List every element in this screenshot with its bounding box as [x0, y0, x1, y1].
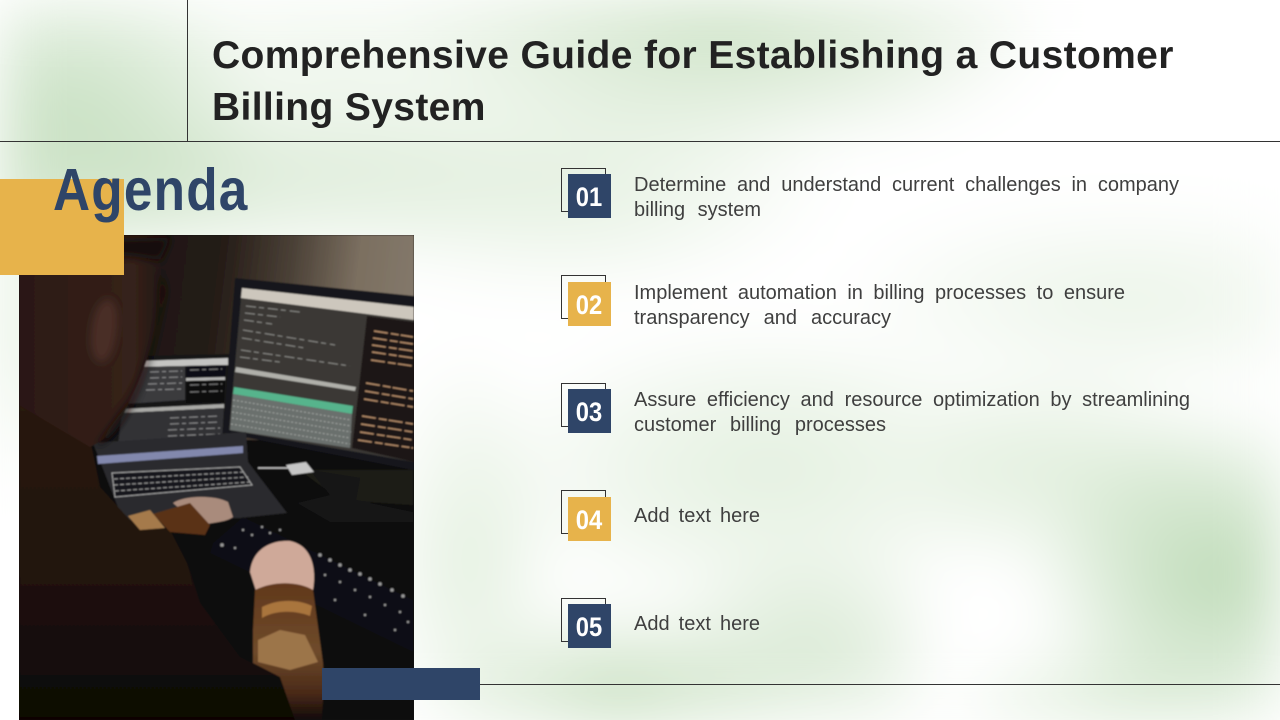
right hand and forearm [250, 541, 324, 720]
number badge 04 [561, 490, 611, 541]
laptop [93, 432, 287, 520]
rule: title divider vertical [187, 0, 188, 141]
item 05 [561, 598, 760, 648]
item text 01: billing system [634, 199, 761, 221]
number badge 03: 03 [576, 397, 603, 427]
photo: person working at computer monitors [19, 235, 414, 720]
left hand and cuff [128, 497, 233, 535]
rule: header horizontal [0, 141, 1280, 142]
number badge 05 [561, 598, 611, 648]
item text 05: Add text here [634, 613, 760, 635]
small monitor [90, 354, 230, 445]
number badge 05: 05 [576, 612, 603, 642]
rule: bottom line [480, 684, 1280, 685]
number badge 01 [561, 168, 611, 218]
heading: Agenda: Agenda [53, 157, 249, 223]
title: Billing System [212, 86, 486, 129]
item 03 [561, 383, 1190, 436]
item 01 [561, 168, 1179, 221]
body: sweater [19, 395, 300, 720]
external keyboard [210, 517, 413, 652]
title [212, 34, 1174, 129]
item text 02: transparency and accuracy [634, 307, 891, 329]
item text 01 [634, 174, 1179, 221]
item text 02: Implement automation in billing processes to ensure [634, 282, 1125, 304]
head [19, 235, 172, 447]
accent: yellow square behind heading [0, 179, 124, 275]
number badge 02: 02 [576, 290, 603, 320]
item text 04: Add text here [634, 505, 760, 527]
item text 03: Assure efficiency and resource optimization by streamlining [634, 389, 1190, 411]
number badge 01: 01 [576, 182, 603, 212]
monitor stand [297, 470, 413, 522]
number badge 04: 04 [576, 505, 603, 535]
item 02 [561, 275, 1125, 329]
item text 02 [634, 282, 1125, 329]
title: Comprehensive Guide for Establishing a Customer [212, 34, 1174, 77]
large monitor [223, 278, 414, 470]
usb dongle [258, 462, 314, 475]
item text 03: customer billing processes [634, 414, 886, 436]
item 04 [561, 490, 760, 541]
item text 03 [634, 389, 1190, 436]
item text 01: Determine and understand current challenges in company [634, 174, 1179, 196]
accent: navy bar [322, 668, 480, 700]
number badge 03 [561, 383, 611, 433]
number badge 02 [561, 275, 611, 326]
